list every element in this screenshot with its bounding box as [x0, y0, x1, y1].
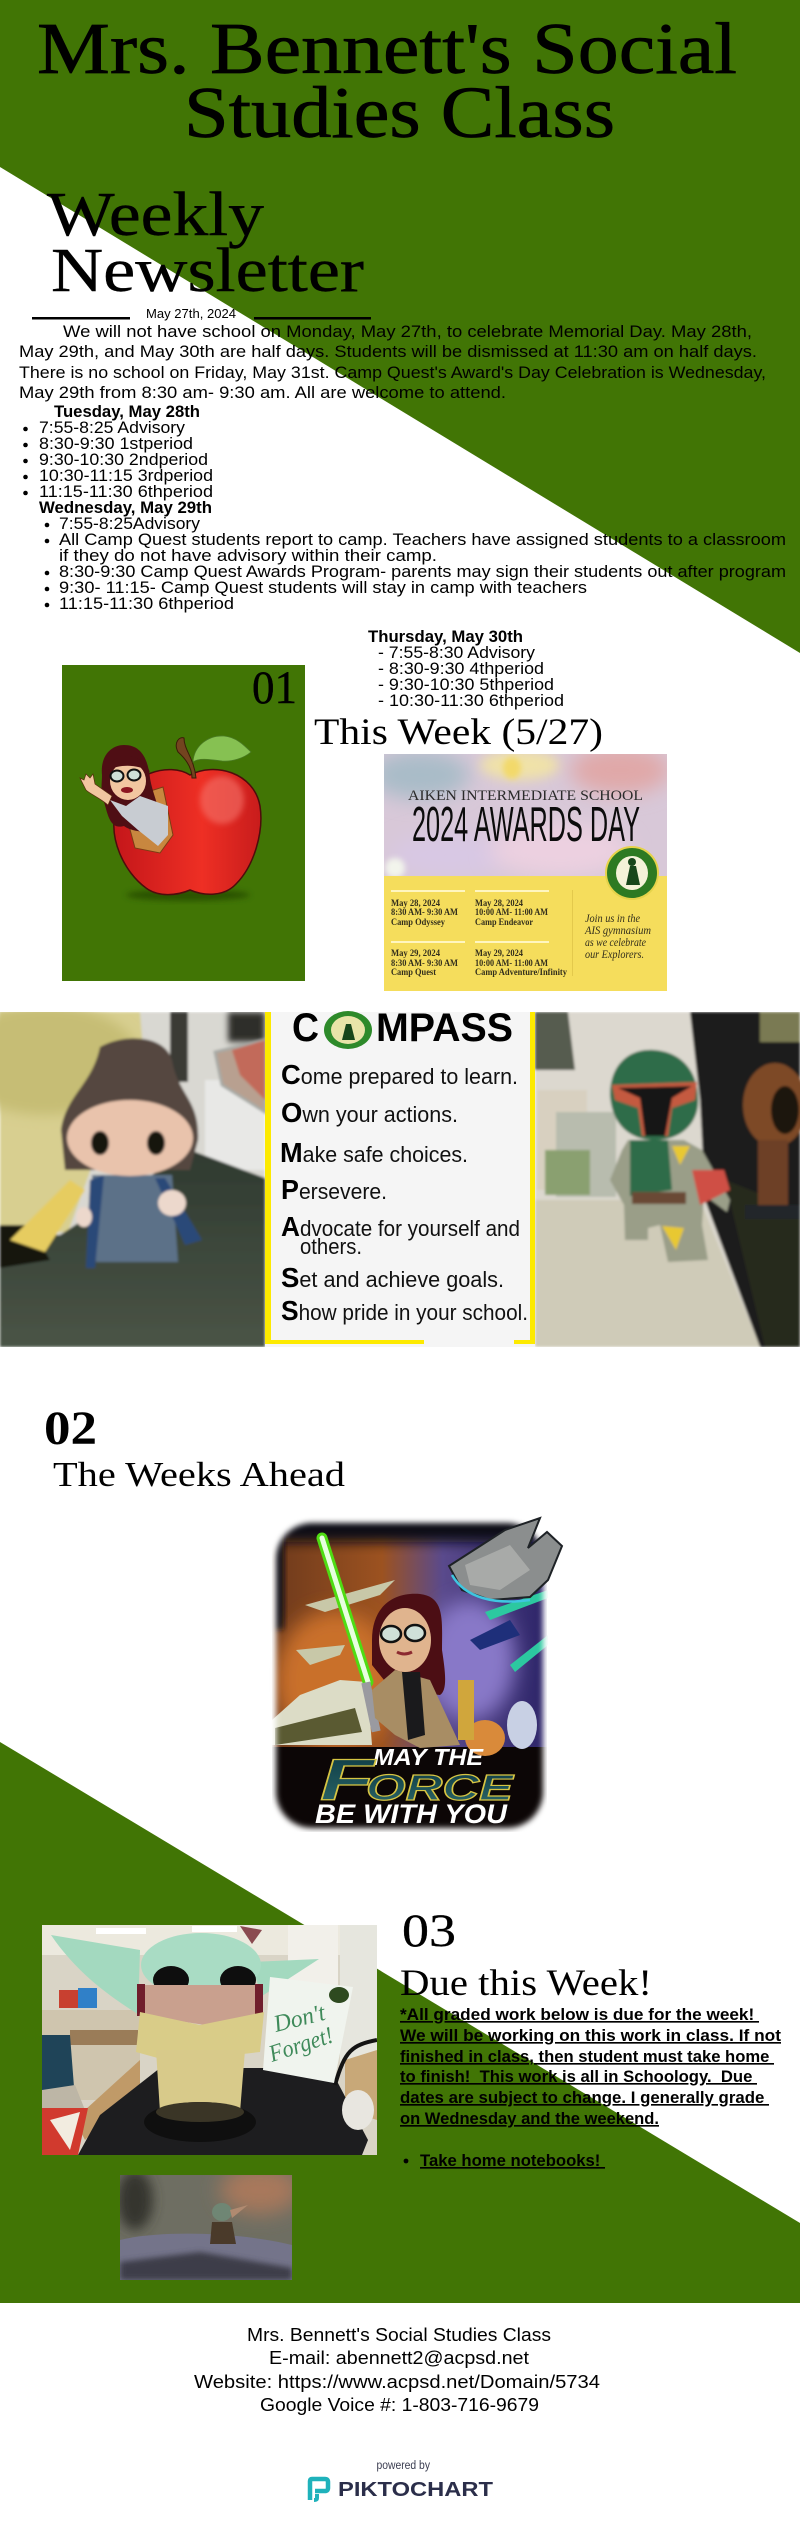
Thursday schedule: - 8:30-9:30 4thperiod	[378, 660, 544, 678]
flyer invitation: AIS gymnasium	[584, 923, 651, 937]
flyer title: AIKEN INTERMEDIATE SCHOOL	[408, 788, 643, 804]
photo: plush doll	[0, 1005, 265, 1347]
Tuesday schedule: 9:30-10:30 2ndperiod	[39, 451, 208, 469]
flyer schedule: Camp Quest	[391, 968, 437, 978]
date line: May 27th, 2024	[146, 307, 236, 321]
title: Mrs. Bennett's Social	[37, 8, 737, 89]
Piktochart logo: powered by	[376, 2460, 430, 2472]
Tuesday schedule	[23, 403, 213, 501]
Thursday schedule: Thursday, May 30th	[368, 628, 523, 646]
footer contact text	[194, 2325, 600, 2415]
flyer schedule: Camp Adventure/Infinity	[475, 968, 567, 978]
poster slogan: BE WITH YOU	[315, 1799, 509, 1829]
Wednesday schedule: 11:15-11:30 6thperiod	[59, 595, 234, 613]
COMPASS list: Own your actions.	[281, 1097, 458, 1128]
COMPASS list: Persevere.	[281, 1174, 387, 1205]
text block: due this week details: We will be working on this work in class. If not	[400, 2027, 782, 2045]
heading: this week: This Week (5/27)	[314, 712, 603, 753]
flyer schedule: May 29, 2024	[391, 949, 440, 959]
flyer schedule: May 28, 2024	[475, 899, 523, 909]
Tuesday schedule: 8:30-9:30 1stperiod	[39, 435, 193, 453]
flyer invitation: our Explorers.	[585, 947, 644, 961]
COMPASS list: Set and achieve goals.	[281, 1262, 504, 1293]
bitmoji	[372, 1594, 460, 1748]
section number 03: 03	[402, 1905, 456, 1957]
text block: due this week details: Take home notebooks!	[420, 2152, 605, 2170]
Wednesday schedule: 9:30- 11:15- Camp Quest students will stay in camp with teachers	[59, 579, 587, 597]
flyer bokeh photo	[384, 754, 667, 876]
intro paragraph: May 29th from 8:30 am- 9:30 am. All are welcome to attend.	[19, 384, 506, 402]
Wednesday schedule	[39, 499, 786, 613]
Thursday schedule: - 10:30-11:30 6thperiod	[378, 692, 564, 710]
Piktochart logo	[310, 2460, 493, 2501]
COMPASS list: others.	[300, 1234, 362, 1259]
flyer schedule: Camp Endeavor	[475, 918, 534, 928]
flyer invitation	[584, 911, 651, 961]
COMPASS list: Advocate for yourself and	[281, 1211, 520, 1242]
text block: due this week details: dates are subject to change. I generally grade	[400, 2089, 769, 2107]
heading: weekly newsletter: Newsletter	[51, 237, 364, 305]
flyer invitation: Join us in the	[585, 911, 641, 925]
flyer invitation: as we celebrate	[585, 935, 647, 949]
COMPASS heading: MPASS	[376, 1006, 513, 1050]
intro paragraph: We will not have school on Monday, May 27th, to celebrate Memorial Day. May 28th,	[63, 323, 752, 341]
COMPASS heading: C	[292, 1006, 319, 1050]
Wednesday schedule: 8:30-9:30 Camp Quest Awards Program- parents may sign their students out after program	[59, 563, 786, 581]
Thursday schedule	[368, 628, 564, 710]
note: don't forget: Forget!	[265, 2023, 337, 2068]
falcon ship	[449, 1518, 562, 1602]
poster slogan: F	[320, 1748, 376, 1813]
Piktochart logo: PIKTOCHART	[338, 2479, 493, 2501]
image: May the Force bitmoji poster	[262, 1510, 562, 1832]
flyer schedule: 8:30 AM- 9:30 AM	[391, 908, 458, 918]
section number 01: 01	[252, 662, 297, 714]
footer contact text: Mrs. Bennett's Social Studies Class	[247, 2325, 551, 2345]
icon: school seal	[606, 847, 658, 899]
note: don't forget: Don't	[270, 2000, 329, 2038]
photo: Boba Fett figure	[535, 1012, 800, 1347]
intro paragraph: May 29th, and May 30th are half days. Students will be dismissed at 11:30 am on half days.	[19, 343, 757, 361]
footer contact text: E-mail: abennett2@acpsd.net	[269, 2348, 529, 2368]
intro paragraph	[19, 323, 766, 402]
text block: due this week details: to finish! This work is all in Schoology. Due	[400, 2068, 757, 2086]
lightsaber	[322, 1538, 381, 1732]
flyer schedule: May 29, 2024	[475, 949, 523, 959]
footer contact text: Google Voice #: 1-803-716-9679	[260, 2395, 539, 2415]
yoda figure	[51, 1933, 319, 2142]
intro paragraph: There is no school on Friday, May 31st. Camp Quest's Award's Day Celebration is Wednesday,	[19, 364, 766, 382]
heading: the weeks ahead: The Weeks Ahead	[53, 1455, 346, 1494]
section number 02: 02	[44, 1402, 97, 1455]
Wednesday schedule: Wednesday, May 29th	[39, 499, 212, 517]
icon: apple with bitmoji teacher	[80, 736, 261, 901]
title: Studies Class	[184, 72, 615, 153]
text block: due this week details: finished in class, then student must take home	[400, 2048, 774, 2066]
Tuesday schedule: Tuesday, May 28th	[54, 403, 200, 421]
poster slogan	[315, 1744, 514, 1829]
flyer schedule: 10:00 AM- 11:00 AM	[475, 908, 548, 918]
title	[37, 8, 737, 153]
COMPASS list	[280, 1059, 528, 1326]
Wednesday schedule: 7:55-8:25Advisory	[59, 515, 201, 533]
footer contact text: Website: https://www.acpsd.net/Domain/5734	[194, 2372, 600, 2392]
heading: weekly newsletter	[47, 181, 364, 305]
panel: awards day flyer	[370, 746, 670, 991]
Tuesday schedule: 11:15-11:30 6thperiod	[39, 483, 213, 501]
Thursday schedule: - 9:30-10:30 5thperiod	[378, 676, 554, 694]
flyer title	[408, 788, 643, 852]
top green diagonal panel	[0, 0, 800, 653]
flyer schedule: May 28, 2024	[391, 899, 440, 909]
text block: due this week details: on Wednesday and the weekend.	[400, 2110, 659, 2128]
flyer schedule: Camp Odyssey	[391, 918, 445, 928]
panel: green apple card	[62, 662, 305, 981]
poster slogan: ORCE	[366, 1767, 514, 1808]
COMPASS list: Show pride in your school.	[281, 1295, 528, 1326]
flyer schedule: 10:00 AM- 11:00 AM	[475, 959, 548, 969]
heading: due this week: Due this Week!	[400, 1963, 652, 2004]
Tuesday schedule: 7:55-8:25 Advisory	[39, 419, 186, 437]
text block: due this week details: *All graded work below is due for the week!	[400, 2006, 759, 2024]
heading: weekly newsletter: Weekly	[47, 181, 264, 249]
flyer schedule: 8:30 AM- 9:30 AM	[391, 959, 458, 969]
photo: Baby Yoda with note	[42, 1925, 377, 2155]
Wednesday schedule: if they do not have advisory within their camp.	[59, 547, 437, 565]
Tuesday schedule: 10:30-11:15 3rdperiod	[39, 467, 213, 485]
COMPASS list: Make safe choices.	[280, 1137, 468, 1168]
Thursday schedule: - 7:55-8:30 Advisory	[378, 644, 536, 662]
flyer schedule	[391, 890, 573, 978]
COMPASS heading	[292, 1006, 513, 1050]
panel: COMPASS poster	[265, 1006, 535, 1347]
text block: due this week details	[400, 2006, 782, 2170]
lower green diagonal panel	[0, 1742, 800, 2303]
note: don't forget	[263, 1977, 353, 2083]
Wednesday schedule: All Camp Quest students report to camp. Teachers have assigned students to a classroom	[59, 531, 786, 549]
poster slogan: MAY THE	[373, 1744, 484, 1770]
photo: small Baby Yoda on log	[120, 2175, 292, 2280]
COMPASS list: Come prepared to learn.	[281, 1059, 518, 1090]
